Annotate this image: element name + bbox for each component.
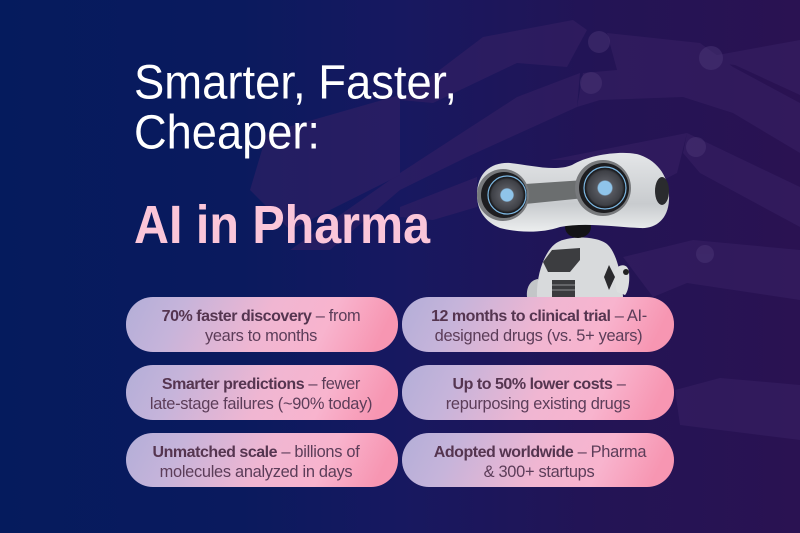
pill: lower costs: Up to 50% lower costs –	[452, 375, 626, 393]
background arm joints	[580, 31, 723, 263]
pill: smarter predictions: Smarter predictions – fewer	[162, 375, 360, 393]
robot neck	[565, 216, 591, 238]
title: Smarter, Faster, Cheaper: Cheaper:	[134, 106, 320, 160]
pill: lower costs	[402, 365, 674, 420]
pill: adopted worldwide: & 300+ startups	[484, 463, 594, 481]
pill: smarter predictions: late-stage failures (~90% today)	[150, 395, 372, 413]
robot head	[477, 153, 669, 232]
pill: faster discovery	[126, 297, 398, 352]
pill: adopted worldwide	[402, 433, 674, 487]
title: Smarter, Faster, Cheaper	[134, 56, 457, 160]
pill: smarter predictions	[126, 365, 398, 420]
pill: unmatched scale	[126, 433, 398, 487]
pill: clinical trial	[402, 297, 674, 352]
robot left eye	[477, 169, 529, 221]
background robotic arms	[250, 20, 800, 440]
pill: faster discovery: 70% faster discovery – from	[162, 307, 360, 325]
pill: unmatched scale: Unmatched scale – billions of	[153, 443, 359, 461]
pill: faster discovery: years to months	[205, 327, 317, 345]
title: Smarter, Faster, Cheaper: Smarter, Faster,	[134, 56, 457, 110]
pill: clinical trial: 12 months to clinical trial – AI-	[431, 307, 647, 325]
icon: robot	[477, 153, 669, 297]
pill: lower costs: repurposing existing drugs	[446, 395, 630, 413]
robot body	[527, 238, 629, 297]
robot bridge	[525, 180, 585, 204]
heading: AI in Pharma: AI in Pharma	[134, 195, 431, 255]
pill: clinical trial: designed drugs (vs. 5+ years)	[435, 327, 642, 345]
robot side sensor	[655, 177, 669, 205]
robot right eye	[575, 160, 631, 216]
pill: unmatched scale: molecules analyzed in days	[160, 463, 352, 481]
pill: adopted worldwide: Adopted worldwide – Pharma	[434, 443, 646, 461]
